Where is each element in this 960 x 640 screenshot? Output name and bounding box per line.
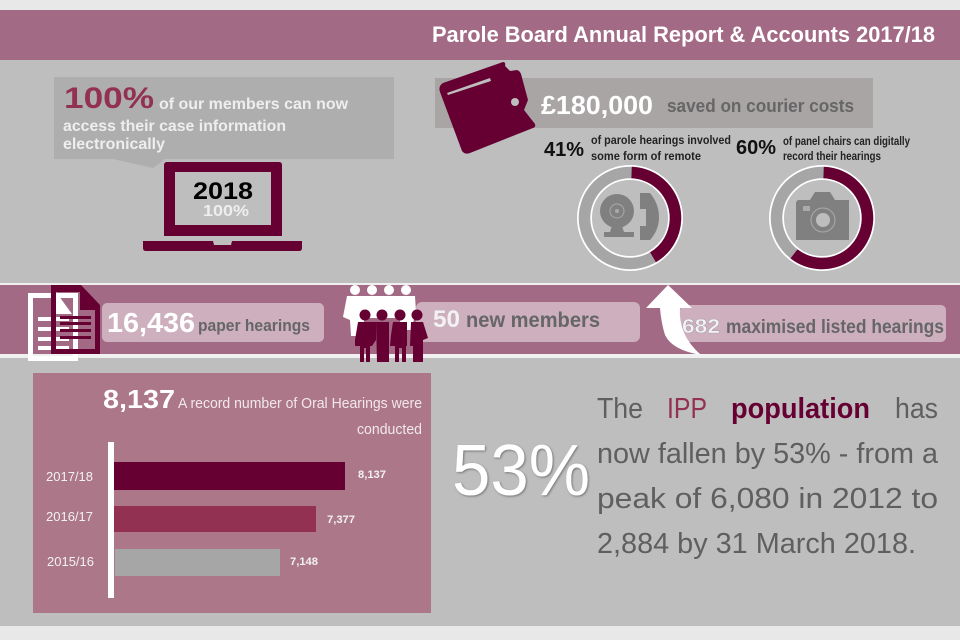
icon: group of people xyxy=(343,285,428,362)
stat: 60% digital recording: of panel chairs can digitally xyxy=(783,136,911,148)
panel: oral hearings bar chart: A record number of Oral Hearings were xyxy=(178,395,422,412)
stat: 60% digital recording xyxy=(736,136,911,163)
band: key numbers xyxy=(0,285,960,362)
text block: IPP population xyxy=(597,393,939,560)
text block: IPP population: has xyxy=(895,393,938,425)
title banner: Parole Board Annual Report & Accounts 2017/18 xyxy=(432,22,935,47)
stat: 41% remote hearings xyxy=(544,135,731,163)
bar: 2016/17: 2016/17 xyxy=(46,509,93,524)
callout: 100% of members: of our members can now xyxy=(159,96,349,113)
stat: 41% remote hearings: some form of remote xyxy=(591,151,701,163)
bar: 2015/16: 2015/16 xyxy=(47,554,94,569)
callout: 100% of members: electronically xyxy=(63,136,165,153)
callout: courier savings xyxy=(435,78,873,128)
callout: 100% of members: access their case information xyxy=(63,118,286,135)
bar: 2016/17 xyxy=(46,506,355,532)
bar: 2017/18 xyxy=(46,462,386,490)
stat: 60% digital recording: 60% xyxy=(736,137,776,159)
bar: 2017/18: 2017/18 xyxy=(46,469,93,484)
text block: IPP population: IPP xyxy=(667,393,707,425)
stat: 41% remote hearings: of parole hearings involved xyxy=(591,135,731,147)
stat: paper hearings: paper hearings xyxy=(198,316,310,335)
stat: maximised listed hearings: maximised listed hearings xyxy=(726,317,944,338)
stat: paper hearings xyxy=(102,303,324,342)
donut chart: 60% with camera icon xyxy=(775,171,869,265)
panel: oral hearings bar chart xyxy=(33,373,431,613)
stat: paper hearings: 16,436 xyxy=(107,307,195,338)
stat: maximised listed hearings: 682 xyxy=(682,316,720,338)
icon: laptop: 100% xyxy=(203,203,249,220)
bar: 2015/16: 7,148 xyxy=(290,556,318,568)
callout: 100% of members xyxy=(54,77,394,168)
bar: 2015/16 xyxy=(47,549,318,576)
text block: IPP population: 2,884 by 31 March 2018. xyxy=(597,528,916,560)
icon: laptop xyxy=(143,162,302,251)
callout: 100% of members: 100% xyxy=(64,82,154,115)
arrow: upward curved xyxy=(646,285,701,355)
text block: IPP population: population xyxy=(731,393,870,425)
stat: 60% digital recording: record their hearings xyxy=(783,151,881,163)
title banner xyxy=(0,10,960,60)
text block: IPP population: now fallen by 53% - from a xyxy=(597,438,939,470)
icon: wallet xyxy=(439,62,535,154)
callout: courier savings: £180,000 xyxy=(541,90,653,120)
stat: new members: new members xyxy=(466,309,600,332)
icon: paper documents xyxy=(28,285,100,361)
bar: 2017/18: 8,137 xyxy=(358,469,386,481)
stat background: listed hearings xyxy=(680,305,946,342)
bar: 2016/17: 7,377 xyxy=(327,514,355,526)
donut chart: 41% with webcam and phone icons xyxy=(583,171,677,265)
callout: courier savings: saved on courier costs xyxy=(667,96,854,116)
icon: laptop: 2018 xyxy=(193,178,253,205)
panel: oral hearings bar chart: conducted xyxy=(357,421,422,438)
stat: new members xyxy=(416,302,640,342)
stat: new members: 50 xyxy=(433,306,460,333)
panel: oral hearings bar chart: 8,137 xyxy=(103,384,175,414)
text block: IPP population: peak of 6,080 in 2012 to xyxy=(597,483,938,515)
stat: 41% remote hearings: 41% xyxy=(544,139,584,161)
big stat: 53%: 53% xyxy=(452,431,590,511)
text block: IPP population: The xyxy=(597,393,643,425)
chart axis xyxy=(108,442,114,598)
